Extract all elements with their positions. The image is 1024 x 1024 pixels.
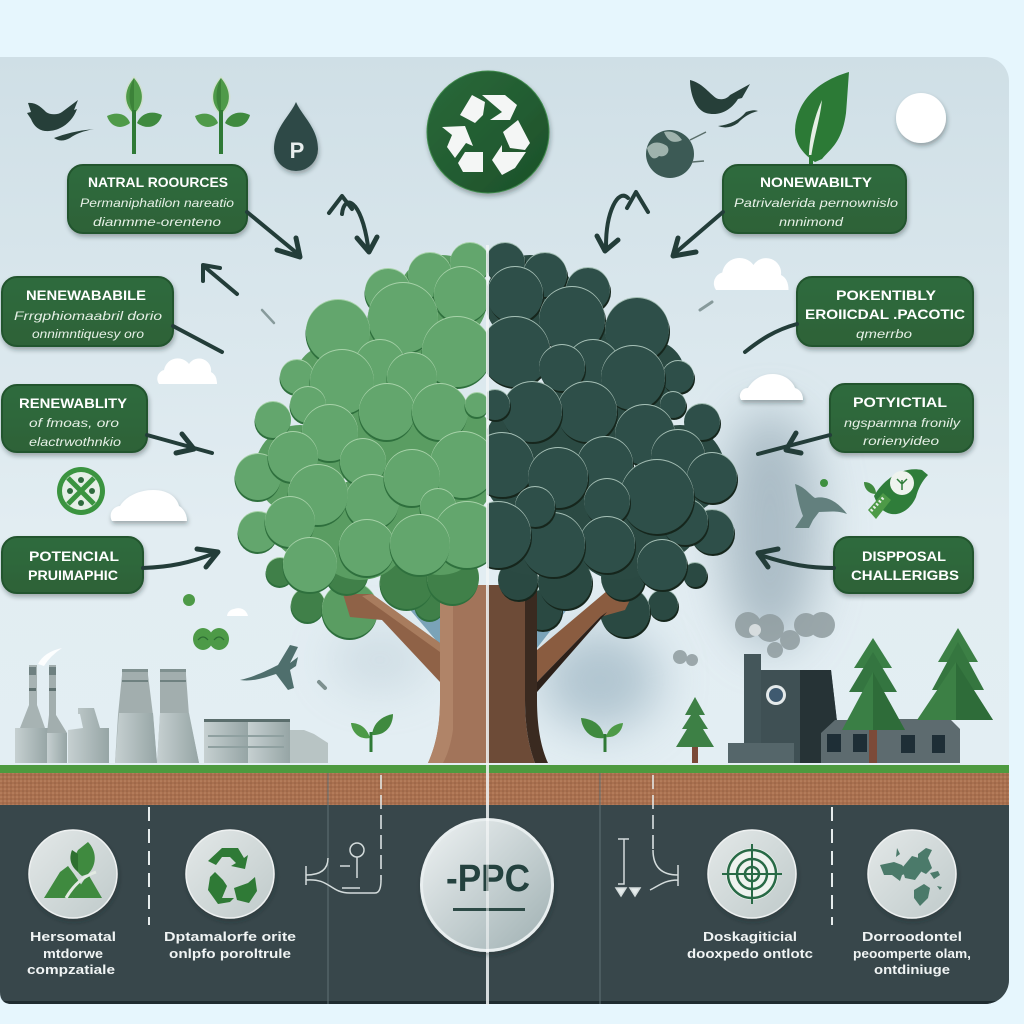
panel label: renewability: of fmoas, oro [29,416,119,430]
arrow: natural resources to tree [247,212,300,257]
text: recycle caption [164,930,296,961]
panel label: renewability: elactrwothnkio [29,435,121,449]
text: environmental caption: mtdorwe [43,947,103,961]
icon: plane [240,645,325,690]
panel label: potentially: POKENTIBLY [836,288,936,303]
icon: oil drop [274,102,318,171]
icon: tiny cloud [227,608,248,616]
panel label: natural resources [68,165,247,233]
icon: bird top right [690,80,758,127]
text: target caption [687,930,813,961]
panel label: nonrenewable: Frrgphiomaabril dorio [14,309,162,323]
panel label: nonrenewability: NONEWABILTY [760,175,872,190]
arrow: faint small right [700,302,712,310]
panel label: renewability: RENEWABLITY [19,396,127,411]
panel label: nonrenewability [723,165,906,233]
icon: tall pine 1 [842,638,905,763]
text: environmental caption [27,930,116,977]
icon: small pine [676,697,714,763]
badge: PPC [420,818,554,953]
panel label: nonrenewable: NENEWABABILE [26,288,146,303]
panel label: potential right [830,384,973,452]
arrow: curved left of recycle [329,196,377,252]
ground and underground band [0,765,1009,1004]
panel label: natural resources: NATRAL ROOURCES [88,175,228,190]
arrow: small up left [203,265,237,294]
panel label: nonrenewability: Patrivalerida pernownislo [734,196,898,210]
panel label: potential [2,537,143,593]
text: recycle caption: onlpfo poroltrule [169,947,291,961]
panel label: disposal challenges: DISPPOSAL [862,549,946,564]
panel label: potential right: rorienyideo [863,434,939,448]
icon: seedling right [581,718,623,752]
panel label: nonrenewable: onnimntiquesy oro [32,327,144,341]
icon circle: environmental [29,830,117,918]
icon: cloud 1 right [714,258,788,290]
sky gaps between branches and trunk [400,598,576,648]
tree [235,243,737,763]
icon: cloud left lower [111,490,187,521]
icon circle: world map [868,830,956,918]
icon: small green dots [183,594,229,650]
arrow: faint small [262,310,274,323]
panel label: natural resources: dianmme-orenteno [93,215,221,229]
panel label: potential: PRUIMAPHIC [28,568,118,583]
tree canopy rear blobs: light half [266,558,445,638]
panel label: disposal challenges [834,537,973,593]
arrow: nonrenewable line [173,326,222,352]
tree canopy: dark half [465,243,737,590]
icon: small bird right [795,479,847,528]
icon: bird top left [27,100,94,140]
diagram: right circuit sketch [616,839,678,896]
icon circle: recycle [186,830,274,918]
tree canopy: light half [235,243,500,592]
industrial plant right with smoke [673,612,960,763]
panel label: nonrenewability: nnnimond [779,215,843,229]
icon: cloud left upper [157,358,217,384]
text: environmental caption: Hersomatal [30,930,116,944]
text: target caption: dooxpedo ontlotc [687,947,813,961]
panel label: disposal challenges: CHALLERIGBS [851,568,959,583]
icon: green leaf with tag [864,469,928,519]
recycling badge [427,71,549,193]
tree canopy lower dark row: light half [328,565,479,611]
industrial plant left [15,648,328,763]
panel label: potential: POTENCIAL [29,549,119,564]
text: environmental caption: compzatiale [27,963,115,977]
tree trunk and branches [343,585,632,763]
icon: tall pine 2 [917,628,993,720]
icon: cloud right 2 [740,374,803,400]
panel label: renewability [2,385,147,452]
icon: globe [646,130,706,178]
icon: crossed green badge [57,467,105,515]
centre divider line [486,245,489,1005]
panel label: potential right: ngsparmna fronily [844,416,961,430]
arrow: potential to tree [143,549,218,568]
text: world map caption: ontdiniuge [874,963,950,977]
text: target caption: Doskagiticial [703,930,797,944]
tree canopy lower dark row: dark half [498,555,645,609]
text: world map caption: peoomperte olam, [853,947,971,961]
arrow: potentially line [745,324,797,352]
arrow: disposal to tree [758,549,834,568]
badge: PPC: -PPC [446,858,530,900]
icon: green leaf [795,72,849,168]
icon: sprout 1 [107,76,162,154]
canopy fill: dark half [480,255,725,580]
arrow: curved right of recycle [597,192,648,251]
canopy fill: light half [255,255,500,580]
arrow: nonrenewability to tree [673,212,723,256]
diagram: left circuit sketch [306,843,381,893]
panel label: potentially: qmerrbo [856,327,912,341]
icon: sprout 2 [195,76,250,154]
icon circle: target [708,830,796,918]
panel label: potential right: POTYICTIAL [853,395,947,410]
panel label: natural resources: Permaniphatilon nareatio [80,196,234,210]
icon: oil drop: P [290,138,304,163]
text: world map caption [853,930,971,977]
arrow: potential right to tree [758,433,830,454]
panel label: potentially: EROIICDAL .PACOTIC [805,307,965,322]
panel label: potentially [797,277,973,346]
tree canopy rear blobs: dark half [522,563,707,637]
icon: sun [896,93,946,143]
text: world map caption: Dorroodontel [862,930,962,944]
icon: seedling left [351,714,393,752]
text: recycle caption: Dptamalorfe orite [164,930,296,944]
arrow: renewability to tree [147,434,212,453]
panel label: nonrenewable [2,277,173,346]
